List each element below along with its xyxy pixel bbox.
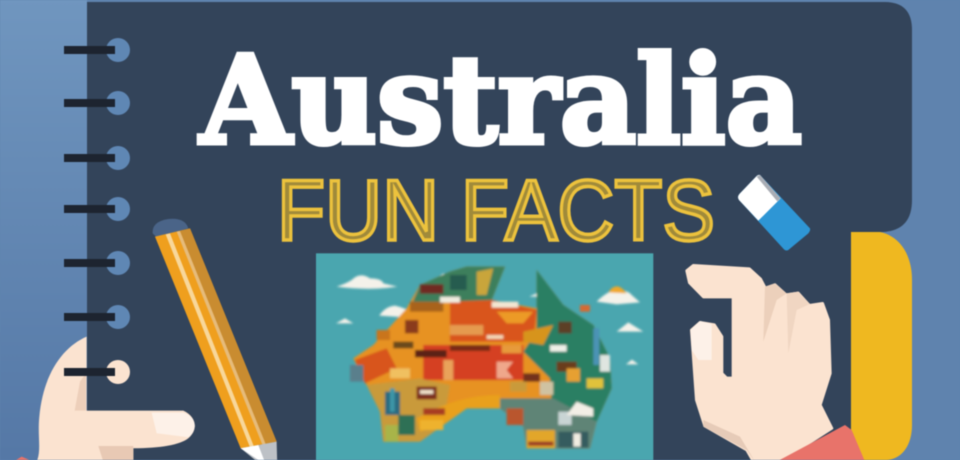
top end [410, 267, 505, 308]
western coast [355, 348, 397, 383]
northern territory top [450, 300, 537, 342]
Australia continent [353, 267, 612, 448]
icon: pencil [153, 219, 277, 460]
yellow tab [851, 232, 912, 460]
sleeve [777, 425, 865, 460]
subtitle: FUN FACTS [277, 163, 715, 259]
southern strip [417, 395, 500, 432]
map details [350, 268, 610, 448]
clouds [336, 273, 643, 364]
south-east [500, 398, 597, 448]
map panel [316, 253, 653, 460]
sun [608, 286, 627, 293]
eastern green [523, 270, 612, 425]
red centre [423, 345, 523, 380]
icon: eraser [738, 175, 810, 251]
icon: right hand [687, 265, 865, 460]
left cover strip [0, 0, 87, 460]
spiral binding bars [64, 46, 115, 376]
title: Australia [199, 28, 802, 172]
map artwork [336, 267, 643, 448]
map sea [316, 253, 653, 460]
icon: left hand [13, 337, 195, 460]
spiral rings [106, 38, 130, 384]
